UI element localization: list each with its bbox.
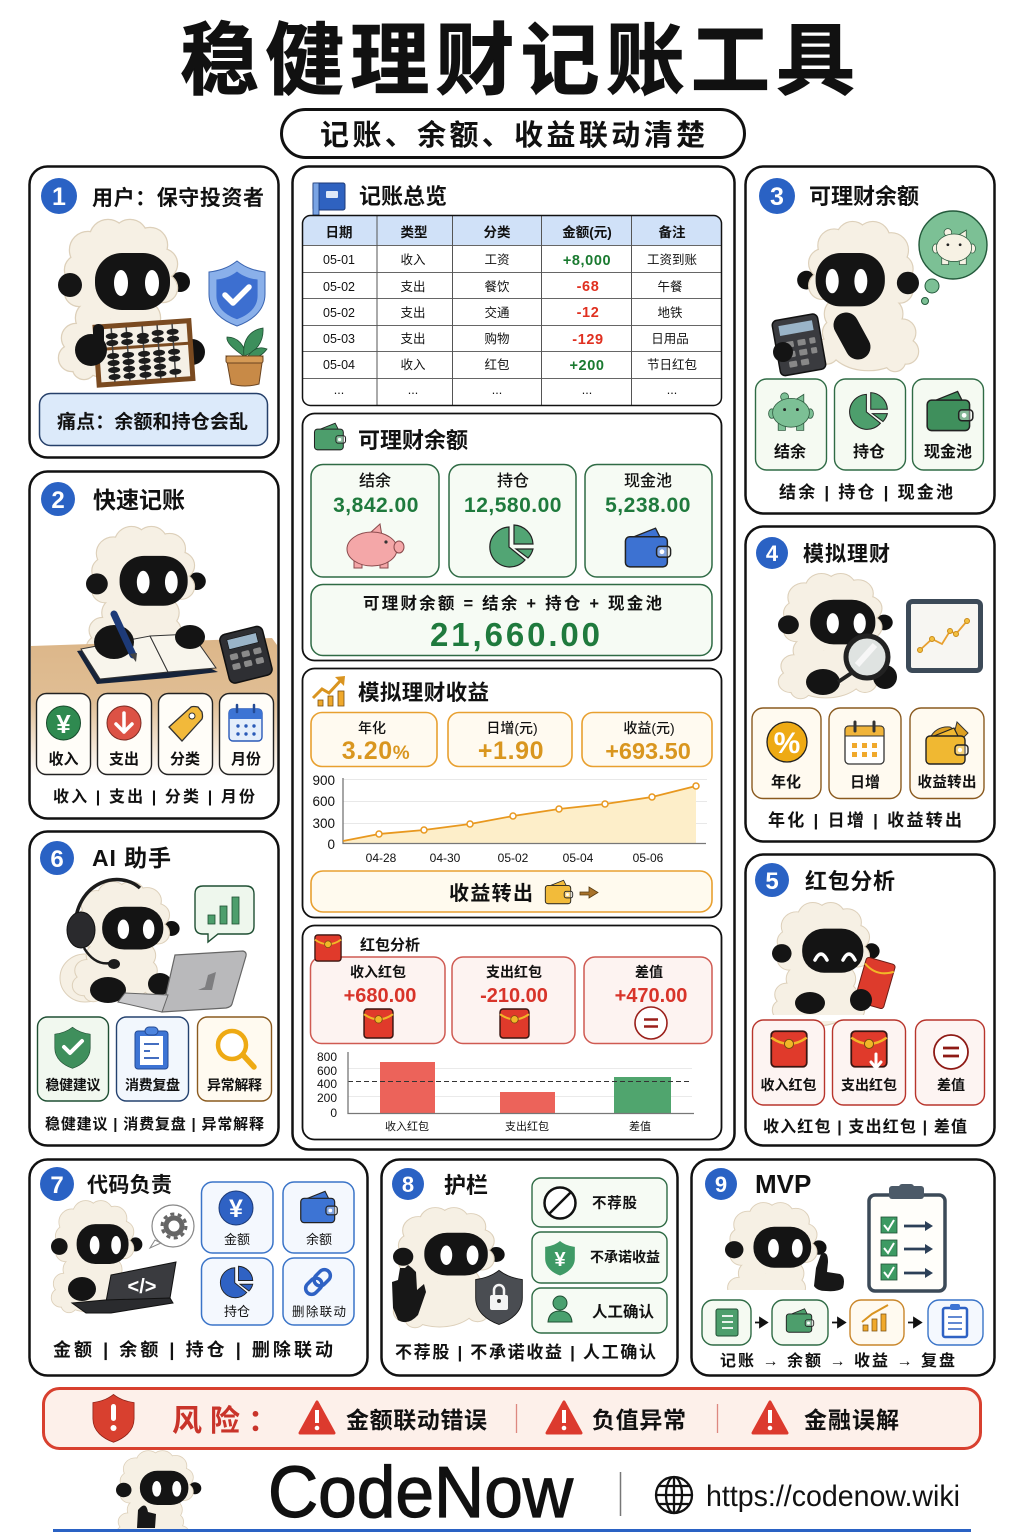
table: ledger: 日期 bbox=[326, 225, 352, 240]
table: ledger: 红包 bbox=[484, 357, 510, 372]
warning: amount linkage error: 金额联动错误 bbox=[346, 1407, 487, 1433]
badge 7: 7 bbox=[50, 1172, 64, 1199]
bar chart: 800 bbox=[317, 1050, 337, 1064]
badge 5 bbox=[755, 863, 789, 897]
table: ledger: ... bbox=[334, 383, 344, 397]
card: surplus: 结余 bbox=[774, 442, 806, 461]
badge 2 bbox=[41, 482, 75, 516]
subtitle pill bbox=[282, 110, 744, 158]
callout: pain point bbox=[40, 394, 268, 446]
warning: financial misunderstanding bbox=[753, 1402, 899, 1433]
heading: ledger overview: 记账总览 bbox=[359, 184, 447, 209]
badge 9 bbox=[705, 1168, 737, 1200]
icon: risk shield bbox=[93, 1394, 134, 1442]
subtitle pill: 记账、余额、收益联动清楚 bbox=[320, 119, 705, 152]
card: anomaly explanation bbox=[198, 1017, 272, 1101]
card: annualized bbox=[311, 712, 437, 766]
bar chart: 支出红包 bbox=[505, 1119, 549, 1133]
caption: 结余 | 持仓 | 现金池 bbox=[779, 482, 953, 502]
mascot bbox=[86, 527, 206, 666]
formula total: 可理财余额 = 结余 + 持仓 + 现金池 bbox=[363, 593, 662, 613]
card: income bbox=[36, 694, 90, 774]
heading: risk: 风险： bbox=[172, 1405, 278, 1438]
card: holdings bbox=[202, 1258, 273, 1325]
card: cash pool: 5,238.00 bbox=[605, 494, 691, 517]
card: difference: 差值 bbox=[635, 964, 663, 980]
card: holdings: 持仓 bbox=[853, 442, 885, 461]
card: balance: 余额 bbox=[306, 1232, 332, 1247]
bar chart: 收入红包 bbox=[385, 1119, 429, 1133]
mascot with calculator bbox=[771, 222, 919, 376]
warning: negative anomaly bbox=[547, 1402, 686, 1433]
panel 2: quick bookkeeping bbox=[30, 472, 278, 818]
heading: simulated investing: 模拟理财 bbox=[803, 543, 890, 566]
badge 4: 4 bbox=[766, 541, 779, 566]
line chart: 300 bbox=[312, 816, 335, 831]
card: no stock picks: 不荐股 bbox=[592, 1195, 638, 1212]
badge 3: 3 bbox=[770, 183, 784, 211]
card: steady advice bbox=[38, 1017, 108, 1101]
table: ledger: -12 bbox=[577, 305, 599, 321]
panel 8: guardrails bbox=[382, 1160, 678, 1376]
mascot with thumbs up bbox=[722, 1203, 844, 1320]
table: ledger: 05-02 bbox=[323, 306, 355, 320]
card: incoming red packets: +680.00 bbox=[344, 985, 416, 1007]
card: month: 月份 bbox=[231, 751, 261, 768]
bar chart: 400 bbox=[317, 1077, 337, 1091]
card: holdings: 12,580.00 bbox=[464, 494, 562, 517]
heading: returns: 模拟理财收益 bbox=[358, 681, 489, 705]
table: ledger: 金额(元) bbox=[562, 224, 612, 240]
card: spending review bbox=[116, 1017, 188, 1101]
card: income: ¥ bbox=[56, 709, 71, 739]
heading: red packets: 红包分析 bbox=[805, 869, 895, 894]
mascot with headset and laptop bbox=[60, 880, 246, 1012]
badge 9: 9 bbox=[715, 1172, 727, 1197]
footer rule bbox=[53, 1529, 971, 1532]
card: annualized: % bbox=[774, 727, 800, 760]
mascot with laptop bbox=[51, 1201, 176, 1313]
card: difference: 差值 bbox=[937, 1077, 965, 1093]
card: incoming bbox=[752, 1020, 824, 1105]
card: daily increase: 日增 bbox=[850, 773, 880, 791]
bar chart: 0 bbox=[330, 1106, 337, 1120]
card: expense bbox=[98, 694, 152, 774]
line chart: 04-30 bbox=[430, 851, 461, 865]
card: cash pool bbox=[585, 464, 712, 577]
card: earnings bbox=[582, 712, 712, 766]
line chart bbox=[312, 773, 707, 865]
heading: balance: 可理财余额 bbox=[358, 428, 468, 453]
table: ledger: 05-02 bbox=[323, 280, 355, 294]
table: ledger: 支出 bbox=[400, 306, 426, 320]
card: incoming red packets: 收入红包 bbox=[350, 964, 406, 980]
table: ledger: +8,000 bbox=[563, 253, 611, 269]
table: ledger: 收入 bbox=[400, 253, 426, 267]
card: category bbox=[158, 694, 212, 774]
table: ledger: 日用品 bbox=[651, 332, 689, 346]
card: amount: ¥ bbox=[229, 1195, 243, 1223]
badge 6: 6 bbox=[50, 846, 64, 873]
line chart: 600 bbox=[312, 794, 335, 809]
card: outgoing red packets: -210.00 bbox=[480, 985, 548, 1007]
card: outgoing: 支出红包 bbox=[841, 1077, 897, 1093]
panel: red packet analysis bbox=[302, 926, 722, 1140]
badge 3 bbox=[759, 178, 795, 214]
card: no guaranteed return: ¥ bbox=[554, 1249, 566, 1271]
table: ledger bbox=[302, 216, 722, 406]
line chart: 05-06 bbox=[633, 851, 664, 865]
card: income: 收入 bbox=[48, 751, 79, 768]
card: no guaranteed return bbox=[532, 1232, 667, 1283]
card: cash pool bbox=[912, 379, 984, 470]
warning: financial misunderstanding: 金融误解 bbox=[804, 1407, 899, 1433]
desk bbox=[31, 638, 277, 776]
caption: 金额 | 余额 | 持仓 | 删除联动 bbox=[53, 1339, 333, 1360]
table: ledger: 支出 bbox=[400, 332, 426, 346]
icon: chart speech bubble bbox=[195, 886, 254, 942]
line chart: 0 bbox=[327, 837, 335, 852]
card: no guaranteed return: 不承诺收益 bbox=[590, 1249, 660, 1265]
card: transfer out: 收益转出 bbox=[918, 773, 976, 791]
table: ledger: 工资到账 bbox=[647, 253, 697, 267]
panel 4: simulated investing bbox=[746, 526, 994, 842]
caption: 收入 | 支出 | 分类 | 月份 bbox=[53, 787, 255, 806]
card: surplus: 3,842.00 bbox=[333, 494, 419, 517]
line chart: 05-04 bbox=[563, 851, 594, 865]
table: ledger: ... bbox=[492, 383, 502, 397]
table: ledger: 购物 bbox=[484, 331, 510, 346]
badge 7 bbox=[40, 1167, 74, 1201]
mascot with magnifier bbox=[778, 574, 897, 698]
card: daily gain bbox=[448, 712, 572, 766]
card: holdings bbox=[834, 379, 906, 470]
card: incoming red packets bbox=[310, 957, 445, 1044]
panel 9: MVP bbox=[692, 1160, 994, 1376]
heading: AI assistant: AI 助手 bbox=[92, 845, 171, 871]
panel: available balance bbox=[302, 414, 722, 660]
icon: calculator bbox=[219, 625, 273, 684]
badge 8: 8 bbox=[402, 1172, 414, 1197]
badge 2: 2 bbox=[51, 487, 65, 514]
mascot with shield and stop hand bbox=[392, 1208, 522, 1327]
line chart: 04-28 bbox=[366, 851, 397, 865]
badge 5: 5 bbox=[765, 868, 779, 895]
heading: MVP: MVP bbox=[755, 1169, 811, 1199]
bar chart: 差值 bbox=[629, 1119, 651, 1133]
heading: code ownership: 代码负责 bbox=[87, 1174, 172, 1197]
card: outgoing red packets bbox=[452, 957, 575, 1044]
table: ledger: ... bbox=[582, 383, 592, 397]
table: ledger: 05-01 bbox=[323, 253, 355, 267]
badge 4 bbox=[756, 537, 788, 569]
caption: 不荐股 | 不承诺收益 | 人工确认 bbox=[395, 1343, 656, 1362]
table: ledger: 备注 bbox=[658, 224, 686, 240]
brand wordmark: CodeNow bbox=[268, 1453, 574, 1533]
card: incoming: 收入红包 bbox=[760, 1077, 816, 1093]
bar chart bbox=[317, 1050, 694, 1133]
card: daily gain: 日增(元) bbox=[486, 720, 538, 736]
card: anomaly explanation: 异常解释 bbox=[207, 1077, 262, 1093]
table: ledger: 支出 bbox=[400, 280, 426, 294]
table: ledger: 交通 bbox=[484, 305, 510, 320]
footer mascot bbox=[110, 1451, 220, 1536]
card: difference bbox=[916, 1020, 984, 1105]
card: transfer out bbox=[910, 708, 984, 798]
card: cash pool: 现金池 bbox=[624, 471, 672, 490]
line chart: 900 bbox=[312, 773, 335, 788]
open notebook with hands bbox=[77, 614, 218, 684]
heading: user: 用户：保守投资者 bbox=[92, 186, 264, 210]
table: ledger: 05-04 bbox=[323, 358, 355, 372]
icon: gear bubble bbox=[150, 1205, 194, 1248]
card: spending review: 消费复盘 bbox=[125, 1077, 180, 1093]
icon: potted plant bbox=[226, 328, 267, 386]
card: expense: 支出 bbox=[109, 751, 139, 768]
icon: checklist clipboard bbox=[869, 1184, 945, 1291]
caption: 稳健建议 | 消费复盘 | 异常解释 bbox=[45, 1115, 264, 1133]
card: steady advice: 稳健建议 bbox=[46, 1077, 100, 1093]
badge 1: 1 bbox=[52, 183, 66, 211]
icon: red packet bbox=[315, 935, 341, 961]
heading: quick bookkeeping: 快速记账 bbox=[93, 487, 185, 513]
card: month bbox=[220, 694, 274, 774]
card: delete cascade: 删除联动 bbox=[292, 1304, 346, 1319]
table: ledger: 05-03 bbox=[323, 332, 355, 346]
website URL: https://codenow.wiki bbox=[706, 1480, 960, 1513]
panel 1: user bbox=[30, 166, 278, 458]
table: ledger: 节日红包 bbox=[647, 357, 697, 372]
badge 8 bbox=[392, 1168, 424, 1200]
formula total: 21,660.00 bbox=[430, 616, 600, 653]
card: no stock picks bbox=[532, 1178, 667, 1227]
table: ledger: 地铁 bbox=[657, 306, 683, 320]
bar chart: 600 bbox=[317, 1064, 337, 1078]
card: annualized bbox=[752, 708, 821, 798]
card: earnings: +693.50 bbox=[605, 738, 691, 764]
panel 3: available balance bbox=[746, 166, 994, 514]
panel: simulated returns bbox=[302, 668, 722, 918]
table: ledger: +200 bbox=[569, 358, 605, 374]
mascot with red packet bbox=[770, 903, 896, 1026]
card: annualized: 年化 bbox=[771, 773, 801, 791]
table: ledger: -129 bbox=[572, 332, 604, 348]
table: ledger: 类型 bbox=[400, 225, 428, 240]
card: annualized: 年化 bbox=[358, 720, 386, 736]
panel: center dashboard bbox=[292, 166, 734, 1150]
table: ledger: ... bbox=[408, 383, 418, 397]
icon: ledger book bbox=[313, 183, 345, 215]
table: ledger: ... bbox=[667, 383, 677, 397]
card: amount: 金额 bbox=[224, 1232, 250, 1247]
warning: amount linkage error bbox=[300, 1402, 487, 1433]
badge 1 bbox=[41, 178, 77, 214]
icon: globe bbox=[656, 1477, 692, 1513]
card: earnings: 收益(元) bbox=[623, 720, 675, 736]
card: surplus bbox=[311, 464, 439, 577]
bar chart: 200 bbox=[317, 1091, 337, 1105]
card: balance bbox=[283, 1182, 354, 1253]
table: ledger: 午餐 bbox=[657, 279, 683, 294]
card: daily gain: +1.90 bbox=[478, 737, 544, 765]
caption: 收入红包 | 支出红包 | 差值 bbox=[763, 1117, 967, 1136]
panel 6: AI assistant bbox=[30, 832, 278, 1146]
card: difference bbox=[584, 957, 712, 1044]
card: amount bbox=[202, 1182, 273, 1253]
card: outgoing red packets: 支出红包 bbox=[486, 964, 542, 980]
card: difference: +470.00 bbox=[615, 985, 687, 1007]
title: 稳健理财记账工具 bbox=[180, 16, 855, 105]
badge 6 bbox=[40, 841, 74, 875]
card: holdings bbox=[449, 464, 576, 577]
table: ledger: 收入 bbox=[400, 358, 426, 372]
card: surplus bbox=[756, 379, 826, 470]
warning: negative anomaly: 负值异常 bbox=[592, 1407, 686, 1433]
card: category: 分类 bbox=[170, 751, 200, 768]
card: cash pool: 现金池 bbox=[924, 442, 972, 461]
button: transfer out earnings: 收益转出 bbox=[449, 882, 533, 905]
callout: pain point: 痛点：余额和持仓会乱 bbox=[57, 410, 248, 433]
thought bubble: piggy bbox=[919, 211, 987, 304]
flow: bookkeeping to review bbox=[702, 1300, 983, 1345]
caption: 年化 | 日增 | 收益转出 bbox=[768, 810, 962, 830]
icon: chart monitor bbox=[908, 602, 980, 670]
icon: rising bars bbox=[313, 676, 345, 706]
card: human confirmation: 人工确认 bbox=[592, 1303, 654, 1321]
heading: balance: 可理财余额 bbox=[809, 184, 919, 209]
card: annualized: 3.20% bbox=[342, 737, 410, 765]
card: surplus: 结余 bbox=[359, 471, 391, 490]
icon: blue shield bbox=[209, 261, 265, 326]
caption: 记账 → 余额 → 收益 → 复盘 bbox=[720, 1351, 955, 1370]
card: human confirmation bbox=[532, 1288, 667, 1333]
table: ledger: 工资 bbox=[484, 253, 510, 267]
card: outgoing bbox=[832, 1020, 906, 1105]
panel 7: code ownership bbox=[30, 1160, 368, 1376]
formula total bbox=[311, 584, 712, 656]
card: delete cascade bbox=[283, 1258, 354, 1325]
line chart: 05-02 bbox=[498, 851, 529, 865]
button: transfer out earnings bbox=[311, 871, 712, 912]
table: ledger: 餐饮 bbox=[484, 279, 510, 294]
risk banner bbox=[44, 1388, 980, 1448]
table: ledger: 分类 bbox=[484, 225, 511, 240]
heading: red packet: 红包分析 bbox=[360, 936, 420, 954]
card: holdings: 持仓 bbox=[497, 472, 529, 490]
mascot with laptop: </> bbox=[128, 1276, 156, 1298]
card: daily increase bbox=[829, 708, 901, 798]
icon: green wallet bbox=[314, 423, 346, 450]
heading: guardrails: 护栏 bbox=[444, 1173, 488, 1198]
card: holdings: 持仓 bbox=[224, 1304, 250, 1319]
table: ledger: -68 bbox=[577, 279, 599, 295]
mascot with abacus bbox=[58, 220, 205, 385]
panel 5: red packet analysis bbox=[746, 854, 994, 1146]
